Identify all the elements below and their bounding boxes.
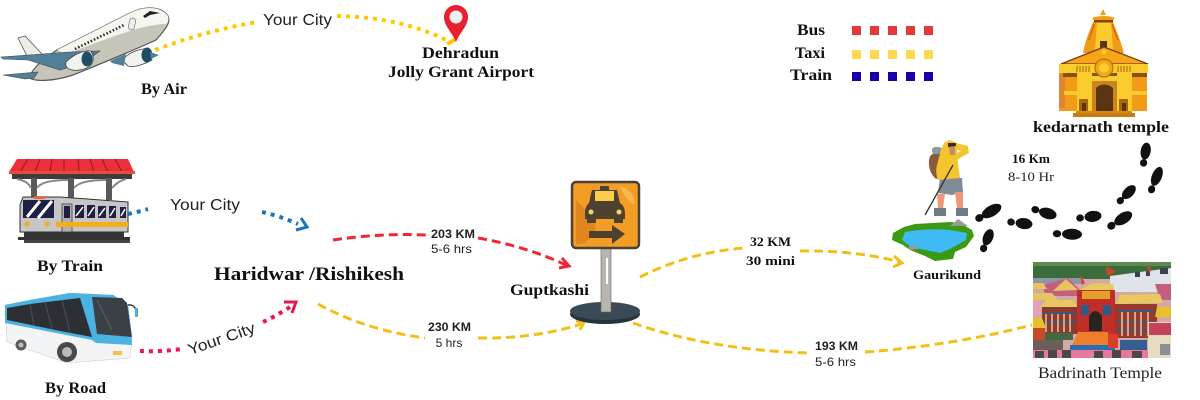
label: Your City (train): Your City (170, 197, 240, 214)
label: 203 KM 5-6 hrs: 203 KM (431, 227, 475, 241)
route: train dotted line start (128, 209, 148, 214)
label: Dehradun Jolly Grant Airport: Jolly Grant Airport (388, 64, 535, 81)
arrow: road route to Haridwar (263, 302, 296, 322)
label: 193 KM 5-6 hrs: 5-6 hrs (815, 355, 856, 369)
label: 230 KM 5 hrs: 5 hrs (436, 336, 462, 350)
label: 16 Km 8-10 Hr: 16 Km (1012, 151, 1050, 166)
label: 203 KM 5-6 hrs: 5-6 hrs (431, 242, 472, 256)
label: By Road: By Road (45, 380, 106, 397)
arrow: train route to Haridwar (262, 212, 307, 230)
label: Guptkashi: Guptkashi (510, 282, 590, 299)
label: 16 Km 8-10 Hr (1008, 151, 1055, 184)
legend (790, 22, 933, 84)
label: Dehradun Jolly Grant Airport: Dehradun (422, 45, 499, 62)
label: Your City (air): Your City (263, 12, 332, 29)
label: Haridwar / Rishikesh: Haridwar /Rishikesh (214, 264, 404, 285)
label: Your City (road): Your City (186, 320, 258, 359)
label: By Air: By Air (141, 81, 187, 98)
label: 193 KM 5-6 hrs (815, 339, 858, 369)
icon: airplane (1, 8, 169, 80)
label: 230 KM 5 hrs: 230 KM (428, 320, 471, 334)
label: 16 Km 8-10 Hr: 8-10 Hr (1008, 169, 1055, 184)
legend: Bus (797, 22, 825, 39)
route: yellow dashed from Guptkashi to distance label (640, 248, 745, 277)
label: 32 KM 30 mini: 32 KM (750, 234, 791, 249)
icon: train station and train (9, 159, 135, 243)
photo: Badrinath temple (1033, 262, 1171, 358)
label: 32 KM 30 mini: 30 mini (746, 253, 795, 268)
icon: Kedarnath temple (1059, 9, 1148, 117)
icon: bus (5, 293, 138, 363)
route: red dashed line to distance label (333, 235, 426, 240)
icon: Gaurikund lake (892, 219, 974, 261)
label: kedarnath temple: kedarnath temple (1033, 119, 1169, 136)
icon: footprints trail (973, 142, 1165, 254)
route: yellow dashed from Haridwar (318, 304, 425, 338)
legend: Train (790, 67, 832, 84)
route: yellow dashed from Guptkashi (633, 323, 808, 353)
icon: taxi road sign (570, 182, 640, 324)
legend: Taxi (795, 45, 826, 62)
label: 203 KM 5-6 hrs (431, 227, 475, 256)
arrow: red dashed to Guptkashi (478, 238, 569, 268)
label: 193 KM 5-6 hrs: 193 KM (815, 339, 858, 353)
label: 32 KM 30 mini (746, 234, 795, 268)
arrow: yellow dashed to Guptkashi (478, 321, 584, 338)
label: By Train: By Train (37, 258, 103, 275)
route: air dotted line to Your City (155, 22, 257, 50)
arrow: yellow dashed to Gaurikund (800, 251, 902, 267)
label: Dehradun Jolly Grant Airport (388, 45, 535, 81)
route: air dotted line to Dehradun (337, 16, 446, 40)
route: road dotted line start (140, 349, 182, 351)
icon: map pin (444, 5, 468, 44)
icon: hiker (925, 140, 969, 216)
label: Badrinath Temple: Badrinath Temple (1038, 365, 1162, 382)
label: 230 KM 5 hrs (428, 320, 471, 350)
route: yellow dashed to Badrinath (865, 325, 1032, 352)
label: Gaurikund: Gaurikund (913, 267, 982, 282)
